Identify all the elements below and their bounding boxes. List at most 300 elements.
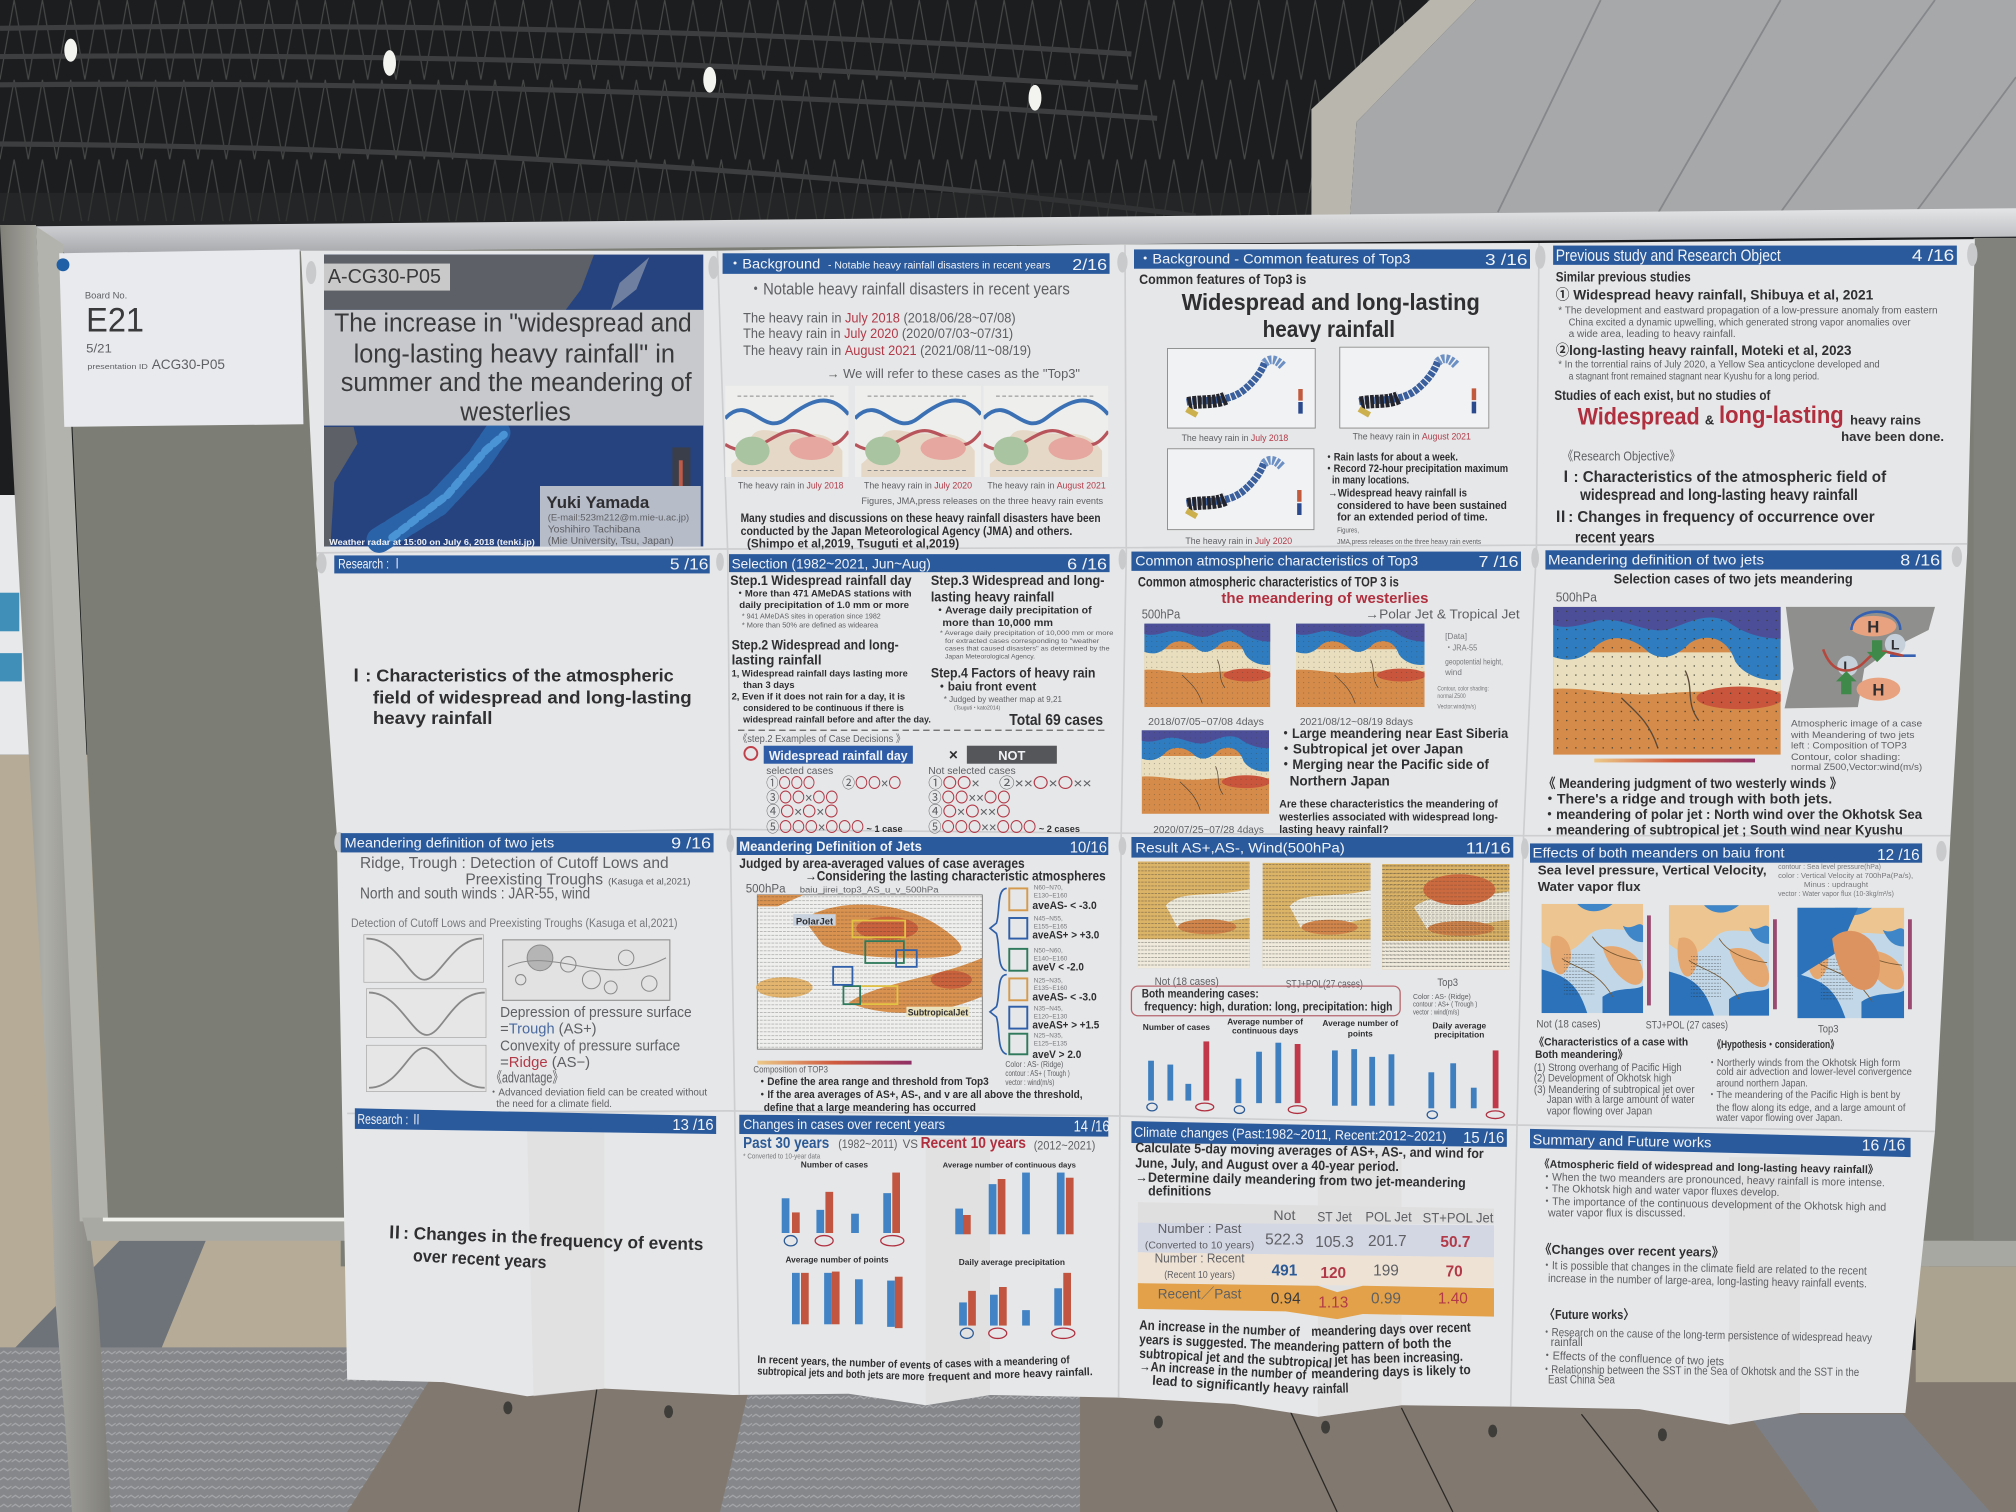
threshold legend: aveV > 2.0: [1032, 1049, 1081, 1061]
steps 3 and 4: Japan Meteorological Agency.: [945, 653, 1035, 660]
heading: Selection cases of two jets meandering: [1614, 572, 1853, 587]
header: Research : Ⅰ: [338, 555, 402, 571]
map captions: The heavy rain in August 2021: [1353, 432, 1471, 443]
chart titles: points: [1348, 1028, 1373, 1038]
comparison table: 1.40: [1438, 1291, 1468, 1308]
figure captions: Figures, JMA,press releases on the three heavy rain events: [861, 496, 1103, 507]
panel 3: common features: [1134, 249, 1530, 547]
schematic note: [1790, 718, 1922, 773]
section statement: [347, 665, 692, 728]
board note: E21: [86, 302, 144, 340]
comparison table: 201.7: [1368, 1233, 1407, 1250]
chart titles: Average number of: [1322, 1018, 1398, 1028]
interpretation text: [489, 1005, 707, 1110]
radar caption: Weather radar at 15:00 on July 6, 2018 (tenki.jp): [329, 537, 535, 547]
header: [1131, 552, 1521, 571]
bar chart: number of cases: [782, 1159, 904, 1246]
header: Changes in cases over recent years: [743, 1116, 945, 1132]
background: hall floor: [0, 755, 2016, 1512]
heading: Judged by area-averaged values of case averages: [739, 856, 1025, 871]
header: [723, 253, 1110, 274]
comparison table: ST Jet: [1317, 1208, 1352, 1224]
composite map: [1553, 607, 1783, 762]
intro: Common features of Top3 is: [1139, 271, 1306, 287]
method text: Calculate 5-day moving averages of AS+, AS-, and wind for: [1135, 1140, 1485, 1161]
poster title: [324, 310, 703, 426]
not selected cases: ~ 2 cases: [1039, 824, 1080, 834]
findings: ・Rain lasts for about a week.: [1324, 451, 1458, 463]
bar chart: continuous days: [943, 1160, 1076, 1234]
interpretation text: =Trough (AS+): [500, 1022, 597, 1038]
bar chart: points: [785, 1255, 903, 1328]
definitions: (Kasuga et al,2021): [608, 877, 690, 887]
conclusion: [757, 1354, 1093, 1384]
header: [1530, 843, 1922, 864]
colour key: [1413, 992, 1478, 1016]
not selected cases: ③〇〇××〇〇: [928, 789, 1011, 805]
conclusion: In recent years, the number of events: [757, 1354, 931, 1372]
atmospheric field summary: ・The importance of the continuous development of the Okhotsk high and: [1542, 1196, 1886, 1214]
heading: [1182, 289, 1480, 342]
poster title: long-lasting heavy rainfall" in: [354, 341, 675, 369]
header: [1131, 1121, 1507, 1147]
selected cases: [744, 746, 913, 835]
header: 6 /16: [1067, 557, 1107, 574]
threshold legend: N25~N35,: [1034, 1033, 1063, 1040]
map key: vector : Water vapor flux (10-3kg/m²/s): [1778, 890, 1894, 898]
heading: Widespread and long-lasting: [1182, 289, 1480, 315]
header: [737, 837, 1108, 856]
vertical velocity maps: [1542, 904, 1912, 1018]
colour key: contour : AS+ ( Trough ): [1413, 1000, 1478, 1009]
header: Effects of both meanders on baiu front: [1533, 845, 1785, 861]
case examples heading: 《step.2 Examples of Case Decisions 》: [738, 733, 905, 745]
colour key: vector : wind(m/s): [1413, 1007, 1460, 1016]
atmospheric schematic: H: [1872, 681, 1884, 700]
header: Summary and Future works: [1533, 1131, 1711, 1150]
header: Meandering definition of two jets: [1548, 551, 1764, 567]
atmospheric schematic: H: [1867, 618, 1879, 637]
comparison table: Not: [1273, 1207, 1295, 1223]
section statement: heavy rainfall: [373, 708, 492, 728]
characteristics text: Japan with a large amount of water: [1547, 1094, 1695, 1106]
section statement: Ⅱ: Changes in the: [386, 1222, 538, 1247]
map key: [1778, 864, 1913, 898]
bar chart: continuous days: Average number of continuous days: [943, 1160, 1076, 1169]
threshold legend: Color : AS- (Ridge): [1005, 1059, 1063, 1069]
heading: Water vapor flux: [1538, 879, 1641, 894]
threshold legend: aveAS- < -3.0: [1032, 900, 1097, 912]
map captions: Top3: [1437, 977, 1458, 989]
comparison table: 199: [1373, 1262, 1399, 1279]
conclusion text: subtropical jet and the subtropical: [1139, 1346, 1332, 1371]
bar chart: precipitation: Daily average precipitation: [959, 1257, 1065, 1267]
header: [1131, 837, 1513, 858]
map key: Minus : updraught: [1804, 882, 1868, 889]
schematic figures: [725, 386, 1108, 477]
comparison table: Number : Recent: [1155, 1251, 1245, 1266]
threshold legend: E120~E130: [1034, 1013, 1068, 1020]
steps 3 and 4: * Judged by weather map at 9,21: [944, 694, 1062, 704]
bullet points: ・Merging near the Pacific side of: [1279, 757, 1489, 772]
bullet points: ・Subtropical jet over Japan: [1279, 741, 1463, 756]
threshold legend: E135~E160: [1034, 985, 1068, 992]
selected cases: Widespread rainfall day: [769, 748, 909, 763]
previous studies: ②long-lasting heavy rainfall, Moteki et al, 2023: [1556, 342, 1852, 358]
heading: →Considering the lasting characteristic atmospheres: [805, 869, 1106, 884]
findings: considered to have been sustained: [1337, 500, 1507, 512]
steps 3 and 4: (Tsuguti・kato2014): [954, 706, 1000, 712]
header: 10/16: [1070, 839, 1107, 856]
map captions: Not (18 cases): [1155, 976, 1219, 988]
judgment text: 《 Meandering judgment of two westerly winds 》: [1543, 776, 1842, 791]
previous studies: Similar previous studies: [1556, 269, 1691, 285]
key gap statement: long-lasting: [1719, 402, 1844, 429]
data note: Vector:wind(m/s): [1437, 703, 1476, 710]
section statement: over recent years: [413, 1245, 547, 1272]
bar chart: points: Average number of points: [785, 1255, 889, 1265]
header: 2/16: [1072, 257, 1107, 274]
comparison table: 1.13: [1318, 1295, 1348, 1312]
section statement: [386, 1222, 704, 1272]
research objective: [1553, 448, 1887, 547]
bar chart: number of cases: [1147, 1041, 1214, 1111]
definitions: Ridge, Trough : Detection of Cutoff Lows and: [360, 855, 669, 872]
atmospheric field summary: 《Atmospheric field of widespread and long-lasting heavy rainfall》: [1539, 1157, 1879, 1176]
map dates: 2020/07/25~07/28 4days: [1153, 825, 1264, 836]
comparison table: Recent／Past: [1158, 1286, 1241, 1302]
steps 3 and 4: [931, 573, 1114, 712]
changes summary: [1539, 1242, 1868, 1290]
threshold legend: N35~N45,: [1034, 1006, 1063, 1013]
header: [1545, 550, 1941, 570]
board: grey panel: [64, 238, 2016, 1266]
not selected cases: ④〇×〇××〇: [928, 803, 1011, 819]
colour key: Color : AS- (Ridge): [1413, 992, 1471, 1001]
atmospheric field summary: [1539, 1157, 1886, 1219]
map dates: 2021/08/12~08/19 8days: [1300, 717, 1413, 728]
interpretation text: ・Advanced deviation field can be created without: [489, 1087, 707, 1098]
schematic note: left : Composition of TOP3: [1791, 740, 1907, 751]
characteristics text: vapor flowing over Japan: [1547, 1106, 1652, 1118]
heading: baiu_jirei_top3_AS_u_v_500hPa: [800, 884, 939, 894]
data note: [Data]: [1445, 631, 1467, 641]
header: 15 /16: [1463, 1130, 1504, 1147]
board note: 5/21: [86, 343, 112, 355]
comparison table: 120: [1320, 1265, 1346, 1282]
panel 9: meandering definition detection: [341, 833, 714, 1110]
header: 5 /16: [670, 557, 708, 574]
board note: [57, 249, 303, 427]
threshold legend: [990, 885, 1099, 1087]
data note: ・JRA-55: [1445, 643, 1478, 653]
bullet points: [1279, 726, 1509, 789]
callout: [1131, 986, 1400, 1016]
schematic note: Contour, color shading:: [1791, 752, 1900, 763]
comparison table: 50.7: [1440, 1234, 1470, 1251]
hypothesis text: water vapor flowing over Japan.: [1716, 1113, 1842, 1124]
jet maps: [1142, 624, 1426, 814]
header: [729, 554, 1110, 574]
threshold legend: E125~E135: [1034, 1040, 1068, 1047]
heading: Sea level pressure, Vertical Velocity,: [1538, 862, 1767, 877]
header: [739, 1115, 1110, 1137]
not selected cases: ②×× 〇×〇××: [999, 775, 1092, 791]
definitions: North and south winds : JAR-55, wind: [360, 886, 590, 903]
characteristics text: (3) Meandering of subtropical jet over: [1534, 1084, 1695, 1096]
not selected cases: ⑤〇〇〇××〇〇〇: [928, 819, 1036, 835]
comparison table: POL Jet: [1365, 1208, 1412, 1224]
hypothesis text: the flow along its edge, and a large amount of: [1716, 1103, 1906, 1114]
height profile charts: [364, 935, 486, 1092]
steps 1 and 2: widespread rainfall before and after the day.: [742, 715, 931, 726]
figure captions: The heavy rain in July 2018: [738, 481, 843, 492]
conclusion: of cases with a meandering of: [933, 1354, 1070, 1371]
header: [334, 555, 710, 574]
panel 6: selection: [729, 554, 1114, 835]
findings: Figures,: [1337, 525, 1359, 534]
panel 8: meandering definition: 500hPa: [1556, 590, 1598, 605]
schematic note: Atmospheric image of a case: [1791, 718, 1922, 729]
header: 9 /16: [671, 836, 711, 853]
future works: rainfall: [1551, 1337, 1583, 1349]
characteristics text: [1534, 1035, 1695, 1118]
steps 1 and 2: * More than 50% are defined as widearea: [742, 622, 878, 629]
data note: [1437, 631, 1503, 710]
future works: ・Research on the cause of the long-term persistence of widespread heavy: [1542, 1327, 1872, 1345]
body text: Many studies and discussions on these heavy rainfall disasters have been: [741, 513, 1101, 525]
findings: [1324, 451, 1508, 546]
conclusion text: lead to significantly heavy: [1152, 1373, 1310, 1397]
not selected cases: Not selected cases: [928, 766, 1016, 777]
hypothesis text: around northern Japan.: [1716, 1078, 1808, 1089]
steps 1 and 2: lasting rainfall: [732, 653, 822, 668]
atmospheric schematic: L: [1891, 636, 1900, 652]
characteristics text: Both meandering》: [1535, 1048, 1628, 1061]
hypothesis text: [1707, 1038, 1912, 1124]
changes summary: increase in the number of large-area, long-lasting heavy rainfall events.: [1548, 1273, 1867, 1290]
method text: June, July, and August over a 40-year period.: [1135, 1155, 1399, 1174]
threshold legend: N45~N55,: [1034, 916, 1063, 923]
map captions: STJ+POL(27 cases): [1286, 978, 1363, 990]
icon: blue push pin: [57, 258, 69, 271]
conclusion text: jet has been increasing.: [1333, 1349, 1463, 1367]
composite maps: [1138, 861, 1509, 969]
definition text: ・Define the area range and threshold from Top3: [757, 1076, 989, 1088]
body text: conducted by the Japan Meteorological Agency (JMA) and others.: [741, 526, 1072, 538]
key gap statement: &: [1705, 412, 1714, 427]
not selected cases: [928, 746, 1092, 835]
chart titles: precipitation: [1434, 1030, 1484, 1040]
callout: frequency: high, duration: long, precipitation: high: [1144, 1000, 1392, 1014]
map captions: Top3: [1818, 1023, 1839, 1035]
atmospheric schematic: L: [1843, 658, 1852, 674]
header: Meandering Definition of Jets: [739, 838, 922, 854]
method text: definitions: [1148, 1184, 1211, 1199]
threshold legend: contour : AS+ ( Trough ): [1005, 1068, 1070, 1078]
total cases: Total 69 cases: [1009, 712, 1103, 729]
steps 3 and 4: more than 10,000 mm: [942, 618, 1053, 629]
heading: (1982~2011): [838, 1139, 898, 1151]
steps 3 and 4: Step.4 Factors of heavy rain: [931, 666, 1095, 681]
atmospheric schematic: [1785, 607, 1935, 708]
bar chart: precipitation: [959, 1257, 1075, 1338]
panel 16: summary: [1530, 1129, 1911, 1386]
poster title: summer and the meandering of: [341, 369, 693, 397]
future works: 〈Future works〉: [1544, 1307, 1634, 1322]
chart titles: Number of cases: [1143, 1022, 1210, 1032]
icon: ceiling lights: [64, 39, 1041, 111]
conclusion text: rainfall: [1312, 1380, 1349, 1397]
chart titles: continuous days: [1232, 1026, 1299, 1036]
bar chart: continuous days: [1234, 1043, 1306, 1113]
authors box: [540, 486, 701, 547]
poster title: westerlies: [459, 398, 571, 426]
characteristics text: (1) Strong overhang of Pacific High: [1534, 1062, 1682, 1074]
conclusion text: [1139, 1317, 1471, 1397]
steps 3 and 4: cases that caused disasters" as determined by the: [945, 646, 1110, 653]
header: Common atmospheric characteristics of Top3: [1135, 553, 1418, 569]
header: 7 /16: [1479, 554, 1518, 571]
threshold legend: E155~E165: [1034, 923, 1068, 930]
steps 3 and 4: for extracted cases corresponding to "weather: [945, 638, 1100, 645]
steps 1 and 2: * 941 AMeDAS sites in operation since 1982: [742, 613, 881, 620]
not selected cases: NOT: [998, 748, 1026, 763]
panel 13: research II: [355, 1108, 716, 1272]
future works: East China Sea: [1548, 1374, 1615, 1386]
data note: geopotential height,: [1445, 657, 1503, 667]
heading: [739, 856, 1106, 895]
definition text: define that a large meandering has occurred: [764, 1102, 976, 1114]
map dates: [1148, 717, 1413, 836]
conclusion text: years is suggested. The meandering: [1139, 1332, 1340, 1355]
steps 1 and 2: 1, Widespread rainfall days lasting more: [732, 668, 908, 679]
heading: 500hPa: [746, 881, 786, 895]
research objective: 《Research Objective》: [1562, 448, 1680, 463]
judgment text: ・meandering of subtropical jet ; South wind near Kyushu: [1543, 822, 1903, 837]
panel 8: meandering definition: [1543, 550, 1941, 837]
heading: * Converted to 10-year data: [743, 1151, 821, 1160]
schematic note: normal Z500,Vector:wind(m/s): [1791, 762, 1922, 773]
not selected cases: ×: [949, 747, 958, 764]
section statement: frequency of events: [540, 1230, 704, 1254]
research objective: widespread and long-lasting heavy rainfall: [1579, 487, 1858, 504]
map captions: [1182, 432, 1471, 547]
threshold legend: aveV < -2.0: [1032, 962, 1084, 974]
heading: ・Notable heavy rainfall disasters in recent years: [748, 279, 1070, 298]
threshold legend: aveAS- < -3.0: [1032, 991, 1097, 1003]
map captions: STJ+POL (27 cases): [1646, 1020, 1728, 1032]
poster id label: A-CG30-P05: [328, 265, 441, 288]
board note: Board No.: [85, 290, 127, 300]
authors box: (Mie University, Tsu, Japan): [548, 536, 674, 547]
header: Result AS+,AS-, Wind(500hPa): [1135, 839, 1345, 855]
selected cases: ⑤〇〇〇×〇〇〇: [766, 819, 864, 835]
steps 1 and 2: daily precipitation of 1.0 mm or more: [739, 600, 910, 611]
threshold legend: aveAS+ > +1.5: [1032, 1020, 1099, 1032]
definition text: ・If the area averages of AS+, AS-, and v are all above the threshold,: [757, 1089, 1083, 1101]
map captions: The heavy rain in July 2018: [1182, 433, 1288, 444]
definitions: [360, 855, 690, 903]
heading: [743, 1135, 1096, 1160]
previous studies: [1556, 269, 1938, 382]
characteristics text: (2) Development of Okhotsk high: [1534, 1072, 1671, 1084]
figure captions: [738, 481, 1106, 507]
interpretation text: =Ridge (AS−): [500, 1055, 590, 1071]
data note: wind: [1444, 667, 1462, 677]
definition text: [757, 1076, 1083, 1114]
threshold legend: E130~E160: [1034, 892, 1068, 899]
threshold legend: vector : wind(m/s): [1005, 1077, 1054, 1087]
event list: The heavy rain in July 2020 (2020/07/03~07/31): [743, 326, 1013, 341]
steps 3 and 4: * Average daily precipitation of 10,000 mm or more: [940, 630, 1114, 637]
conclusion: frequent and more heavy rainfall.: [928, 1366, 1093, 1384]
figure title: Detection of Cutoff Lows and Preexisting Troughs (Kasuga et al,2021): [351, 918, 678, 930]
figure captions: The heavy rain in July 2020: [864, 481, 972, 492]
header: [1530, 1129, 1911, 1157]
selected cases: selected cases: [766, 766, 833, 777]
method text: →Determine daily meandering from two jet-meandering: [1135, 1170, 1466, 1190]
steps 1 and 2: 2, Even if it does not rain for a day, it is: [732, 691, 905, 702]
comparison table: 522.3: [1265, 1232, 1304, 1249]
hypothesis text: cold air advection and lower-level convergence: [1716, 1067, 1912, 1078]
header: 13 /16: [672, 1117, 714, 1134]
panel 2: background: [723, 253, 1110, 551]
comparison table: 0.94: [1271, 1291, 1301, 1308]
interpretation text: Depression of pressure surface: [500, 1005, 692, 1021]
conclusion text: →An increase in the number of: [1139, 1359, 1307, 1382]
comparison table: Number : Past: [1158, 1221, 1242, 1236]
authors box: Yuki Yamada: [546, 493, 650, 512]
steps 1 and 2: than 3 days: [743, 680, 795, 691]
chart titles: Average number of: [1227, 1017, 1303, 1027]
tape clips at sheet corners: [306, 243, 1977, 861]
heading: Common atmospheric characteristics of TOP 3 is: [1138, 574, 1399, 589]
header: Previous study and Research Object: [1556, 246, 1781, 265]
jet labels: [793, 914, 969, 1019]
threshold legend: N25~N35,: [1034, 977, 1063, 984]
hypothesis text: ・Northerly winds from the Okhotsk High form: [1707, 1058, 1900, 1069]
header: 3 /16: [1485, 252, 1527, 269]
composite wind map: [756, 895, 982, 1065]
steps 3 and 4: ・Average daily precipitation of: [935, 605, 1092, 616]
comparison table: (Converted to 10 years): [1145, 1240, 1254, 1251]
body text: [741, 513, 1101, 551]
future works: [1541, 1307, 1872, 1386]
header: ・Background - Common features of Top3: [1138, 251, 1411, 267]
cutoff low map: [503, 940, 670, 1000]
header: 11/16: [1466, 841, 1511, 858]
figure captions: The heavy rain in August 2021: [987, 481, 1106, 492]
board note: ACG30-P05: [152, 356, 225, 372]
question: [1278, 798, 1498, 836]
comparison table: 491: [1272, 1262, 1298, 1279]
comparison table: [1138, 1202, 1494, 1319]
panel 12: effects on baiu front: [1530, 843, 1922, 1124]
heading: the meandering of westerlies: [1221, 591, 1428, 607]
header: [341, 833, 714, 853]
jet labels: PolarJet: [796, 916, 834, 927]
steps 3 and 4: ・baiu front event: [936, 679, 1036, 693]
atmospheric field summary: ・The Okhotsk high and water vapor fluxes develop.: [1542, 1183, 1780, 1199]
header: Research : Ⅱ: [357, 1111, 422, 1127]
board note: presentation ID: [87, 362, 148, 371]
header: 12 /16: [1877, 847, 1920, 864]
steps 3 and 4: lasting heavy rainfall: [931, 590, 1054, 605]
map key: color : Vertical Velocity at 700hPa(Pa/s),: [1778, 873, 1913, 880]
title map image: [324, 255, 703, 546]
question: lasting heavy rainfall?: [1279, 824, 1389, 836]
